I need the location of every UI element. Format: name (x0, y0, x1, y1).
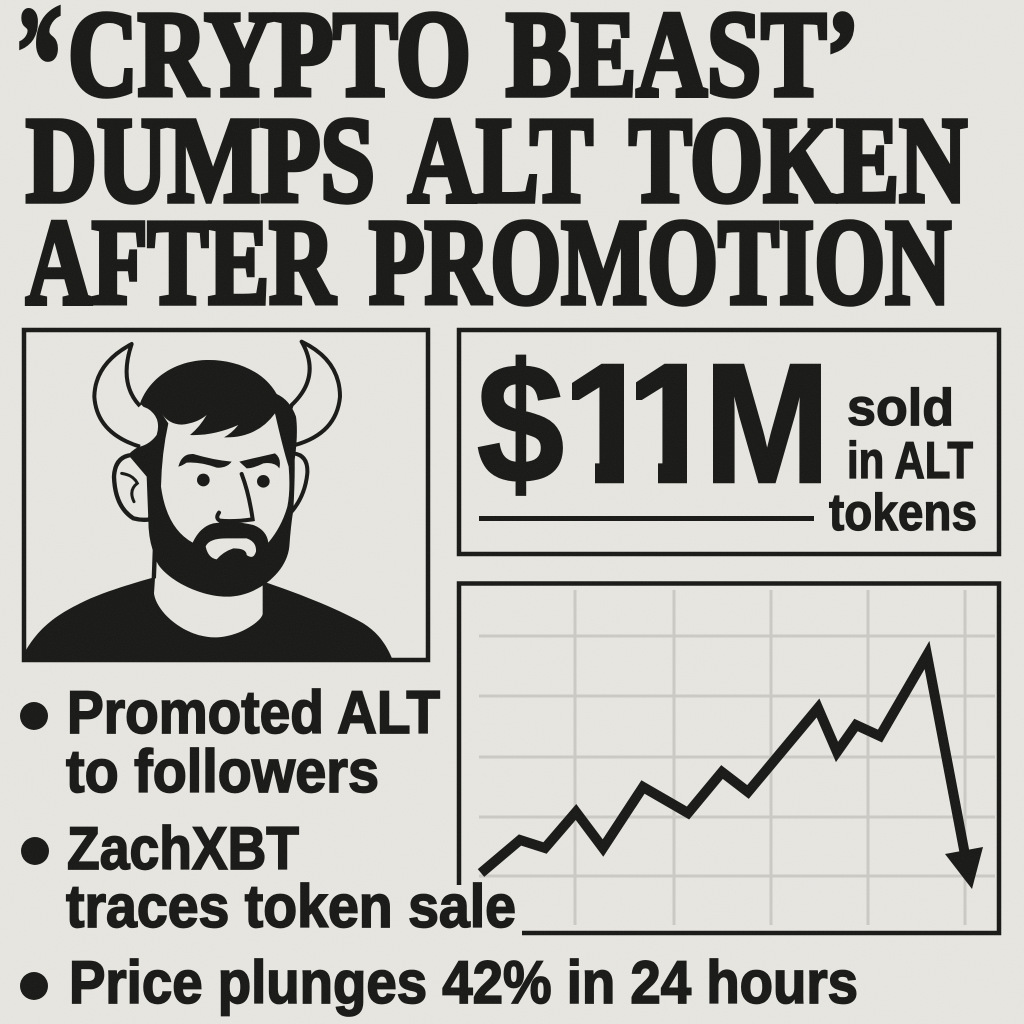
left ear (114, 455, 157, 520)
caption (829, 379, 977, 542)
bullet list (20, 679, 858, 1016)
frame (459, 584, 999, 933)
title line 2: ALT (408, 93, 593, 228)
face (161, 413, 289, 543)
icon: right horn (287, 342, 340, 445)
title line 3 (26, 195, 951, 330)
hair and beard (128, 360, 297, 597)
big number: 1 (561, 329, 656, 519)
title line 3: AFTER (26, 195, 336, 330)
panel: price chart (459, 584, 999, 933)
left eye (197, 474, 210, 486)
caption: tokens (829, 484, 977, 542)
right eye (257, 475, 270, 488)
left horn outline (94, 344, 140, 447)
price line (481, 655, 966, 873)
neck (154, 576, 263, 638)
title (15, 0, 967, 330)
arrowhead (945, 847, 983, 889)
big number: 1 (624, 329, 719, 519)
right ear (291, 453, 307, 513)
grid (479, 590, 995, 925)
big number: M (704, 329, 830, 519)
caption: sold (847, 379, 954, 437)
caption: in ALT (847, 432, 973, 490)
right eyebrow (239, 453, 280, 468)
mouth (206, 538, 256, 559)
left eyebrow (178, 454, 232, 468)
illustration: horned bearded man (23, 342, 394, 663)
left horn (140, 406, 158, 447)
big number: $ (477, 329, 564, 519)
bullet 1: Promoted ALT (67, 679, 440, 746)
title line 2 (26, 93, 967, 228)
underline (479, 516, 814, 521)
panel: portrait (23, 330, 428, 663)
nose (217, 474, 253, 521)
title line 2: DUMPS (26, 93, 375, 228)
big number (478, 354, 821, 496)
bullet 2: traces token sale (66, 873, 516, 940)
bullet 3: Price plunges 42% in 24 hours (69, 949, 858, 1016)
title line 1 (15, 0, 859, 164)
bullet 1 (20, 679, 440, 805)
panel: $11M stat (459, 329, 999, 554)
inner ear (122, 473, 137, 502)
shirt (23, 577, 394, 663)
bullet 2 (21, 815, 516, 940)
bullet 1: to followers (66, 738, 379, 805)
bullet 2: ZachXBT (67, 815, 299, 882)
